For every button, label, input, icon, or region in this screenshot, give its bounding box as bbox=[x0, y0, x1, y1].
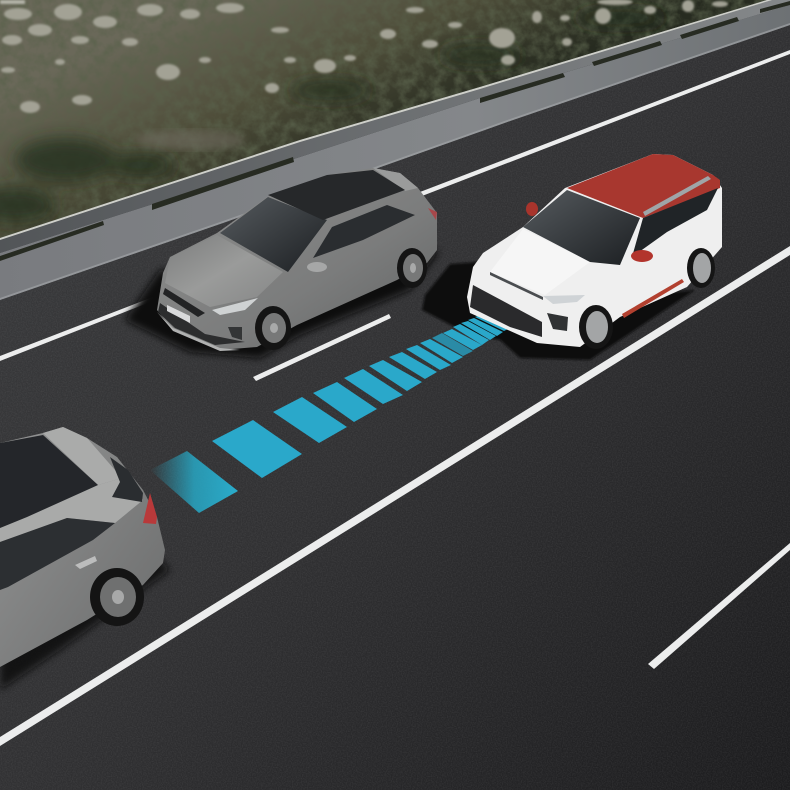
front bumper grille bbox=[158, 303, 245, 345]
wheel bbox=[90, 568, 144, 626]
lower bumper bbox=[157, 312, 240, 351]
car: white and red crossover bbox=[467, 154, 722, 349]
grille bbox=[470, 285, 542, 337]
door handle bbox=[75, 556, 97, 569]
shoulder bbox=[0, 478, 143, 542]
sensor beam stripes bbox=[150, 312, 516, 513]
rear hatch bbox=[43, 427, 122, 485]
headlight bbox=[543, 295, 585, 304]
red mirror bbox=[631, 250, 653, 262]
roof glass bbox=[0, 435, 98, 528]
side windows bbox=[313, 205, 415, 258]
hood line bbox=[490, 272, 543, 300]
hood bbox=[165, 235, 283, 307]
car: grey hatchback rear left bbox=[0, 427, 165, 667]
guardrail and concrete barrier bbox=[0, 0, 790, 300]
mirror bbox=[307, 262, 327, 272]
rear window bbox=[110, 457, 143, 502]
right lamp bbox=[547, 313, 568, 331]
red roof bbox=[567, 154, 720, 218]
body bbox=[0, 427, 165, 667]
roof bbox=[268, 170, 405, 220]
hillside background bbox=[0, 0, 790, 240]
rocks bbox=[0, 0, 728, 113]
red sill bbox=[622, 279, 684, 318]
headlight bbox=[212, 298, 258, 315]
body bbox=[467, 154, 722, 347]
hood shading bbox=[490, 229, 590, 295]
windscreen bbox=[523, 190, 640, 265]
barrier shadow gaps bbox=[0, 1, 790, 261]
tail light bbox=[428, 208, 437, 220]
car: grey hatchback centre bbox=[157, 168, 437, 351]
roof rail bbox=[643, 176, 711, 216]
side windows bbox=[0, 518, 115, 590]
wheels bbox=[255, 306, 291, 350]
car shadows bbox=[0, 250, 695, 690]
rear hatch bbox=[373, 168, 418, 191]
wheels bbox=[579, 305, 613, 349]
side windows bbox=[632, 188, 718, 257]
number plate bbox=[167, 305, 190, 323]
windscreen bbox=[220, 197, 327, 272]
tail light bbox=[143, 493, 157, 524]
body bbox=[157, 168, 437, 350]
fog lamp bbox=[228, 327, 242, 340]
